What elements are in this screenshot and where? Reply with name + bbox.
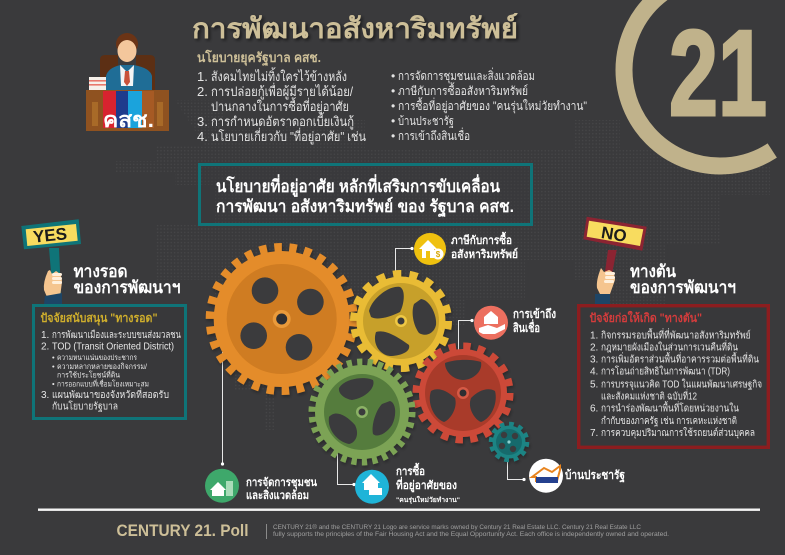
footer: divider bar [266, 524, 267, 539]
dotted world map backdrop [115, 100, 770, 430]
heading: dead end [630, 262, 736, 297]
panel: obstructing factors: และสังคมแห่งชาติ ฉบับที่12 [601, 388, 697, 402]
panel: supporting factors: 3. [41, 390, 49, 401]
panel: obstructing factors: กฎหมายผังเมืองในส่วนการเวนคืนที่ดิน [601, 340, 738, 354]
panel: obstructing factors: การควบคุมปริมาณการใช้รถยนต์ส่วนบุคคล [601, 427, 755, 439]
callout: community and environment: และสิ่งแวดล้อม [246, 486, 309, 502]
connector lines [222, 248, 523, 484]
text block: government policy: สังคมไทยไม่ทิ้งใครไว้ข้างหลัง [211, 67, 347, 84]
panel: obstructing factors [579, 306, 768, 447]
title: การพัฒนาอสังหาริมทรัพย์ [192, 13, 518, 44]
panel: obstructing factors: 6. [590, 404, 598, 415]
text block: policy bullets [391, 67, 587, 143]
text block: policy bullets: ภาษีกับการซื้ออสังหาริมทรัพย์ [398, 82, 528, 98]
panel: supporting factors: • [52, 353, 55, 362]
text block: government policy: 4. [197, 129, 208, 144]
text block: government policy: การปล่อยกู้เพื่อผู้มีรายได้น้อย/ [211, 83, 353, 100]
panel: obstructing factors: 7. [590, 428, 598, 439]
panel: obstructing factors: 5. [590, 379, 598, 390]
panel: obstructing factors: การนำร่องพัฒนาพื้นที่โดยหน่วยงานใน [601, 401, 739, 415]
footer: legal notice: CENTURY 21® and the CENTURY 21 Logo are service marks owned by Century 21 Real Estate LLC. Century 21 Real Estate LLC [273, 524, 642, 531]
icon: NO sign held in hand [583, 217, 647, 304]
text block: policy bullets: • [391, 84, 395, 98]
footer rule [38, 508, 760, 511]
panel: obstructing factors: กำกับของภาครัฐ เช่น การเคหะแห่งชาติ [601, 416, 737, 427]
panel: supporting factors: 1. [41, 330, 49, 341]
panel: obstructing factors: ปัจจัยก่อให้เกิด "ทางตัน" [590, 310, 702, 325]
text block: government policy: นโยบายเกี่ยวกับ "ที่อยู่อาศัย" เช่น [211, 128, 366, 145]
callout: community and environment [205, 469, 317, 503]
chart: orange gear [211, 248, 353, 390]
heading: way out: ของการพัฒนาฯ [74, 278, 180, 297]
text block: government policy: 2. [197, 84, 208, 99]
text block: policy bullets: • [391, 114, 395, 128]
panel: supporting factors: การพัฒนาเมืองและระบบขนส่งมวลชน [52, 329, 181, 341]
callout: property tax: ภาษีกับการซื้อ [451, 231, 512, 247]
callout: property tax: อสังหาริมทรัพย์ [451, 247, 518, 261]
text block: policy bullets: การจัดการชุมชนและสิ่งแวดล้อม [398, 67, 535, 84]
text block: policy bullets: การซื้อที่อยู่อาศัยของ "คนรุ่นใหม่วัยทำงาน" [398, 97, 587, 114]
text block: policy bullets: • [391, 69, 395, 83]
callout: housing policy headline: การพัฒนา อสังหาริมทรัพย์ ของ รัฐบาล คสช. [216, 196, 514, 218]
panel: supporting factors: TOD (Transit Oriented District) [52, 342, 174, 352]
panel: obstructing factors: 3. [590, 355, 598, 366]
panel: supporting factors: ปัจจัยสนับสนุน "ทางรอด" [40, 311, 158, 326]
panel: supporting factors: • [52, 380, 55, 388]
callout: Pracharat housing: บ้านประชารัฐ [565, 468, 625, 483]
chart: red gear [416, 346, 510, 440]
callout: credit access [474, 306, 556, 340]
text block: policy bullets: • [391, 99, 395, 113]
callout: housing purchase [355, 462, 460, 504]
callout: housing purchase: ที่อยู่อาศัยของ [396, 476, 457, 493]
panel: supporting factors: • [52, 362, 55, 371]
chart: teal gear [491, 424, 527, 460]
callout: community and environment: การจัดการชุมชน [246, 476, 317, 490]
panel: supporting factors: แผนพัฒนาของจังหวัดที่สอดรับ [52, 387, 169, 401]
text block: government policy: 1. [197, 69, 208, 84]
panel: supporting factors: ความหนาแน่นของประชากร [57, 353, 137, 362]
panel: obstructing factors: 4. [590, 367, 598, 378]
footer: legal notice: fully supports the principles of the Fair Housing Act and the Equal Opportunity Act. Each office is independently owned and operated. [273, 532, 669, 538]
callout: housing policy headline: นโยบายที่อยู่อาศัย หลักที่เสริมการขับเคลื่อน [216, 174, 500, 198]
callout: property tax: $ [436, 250, 441, 259]
callout: housing purchase: "คนรุ่นใหม่วัยทำงาน" [396, 495, 460, 504]
text block: policy bullets: • [391, 129, 395, 143]
footer: Century 21 Poll wordmark: CENTURY 21. Poll [116, 522, 248, 540]
panel: supporting factors: ความหลากหลายของกิจกรรม/ [57, 362, 148, 371]
callout: housing purchase: การซื้อ [396, 462, 425, 478]
icon: YES sign held in hand: YES [32, 224, 68, 247]
panel: supporting factors: 2. [41, 342, 49, 352]
text block: government policy: การกำหนดอัตราดอกเบี้ยเงินกู้ [211, 112, 354, 130]
panel: supporting factors: การออกแบบที่เชื่อมโยงเหมาะสม [57, 378, 149, 388]
heading: dead end: ทางตัน [630, 262, 676, 281]
callout: credit access: สินเชื่อ [513, 319, 540, 335]
panel: obstructing factors: 2. [590, 343, 598, 354]
text block: government policy: นโยบายยุครัฐบาล คสช. [197, 49, 321, 67]
panel: supporting factors: การใช้ประโยชน์ที่ดิน [57, 370, 120, 380]
footer: legal notice [273, 524, 669, 538]
callout: housing policy headline [200, 164, 532, 224]
callout: Pracharat housing [529, 459, 625, 493]
panel: obstructing factors: กิจกรรมรอบพื้นที่ที่พัฒนาอสังหาริมทรัพย์ [601, 327, 751, 341]
icon: minister at desk [86, 33, 169, 132]
icon: minister at desk: คสช. [103, 109, 154, 132]
text block: government policy: ปานกลางในการซื้อที่อยู่อาศัย [211, 97, 349, 115]
panel: supporting factors [34, 306, 186, 418]
callout: property tax [414, 231, 518, 265]
heading: way out [74, 262, 180, 297]
text block: government policy: 3. [197, 114, 208, 129]
text block: policy bullets: การเข้าถึงสินเชื่อ [398, 127, 470, 143]
chart: yellow gear [354, 274, 448, 368]
panel: obstructing factors: 1. [590, 330, 598, 341]
chart: green gear [312, 362, 412, 462]
connector end dots [221, 247, 526, 486]
icon: NO sign held in hand: NO [600, 223, 628, 246]
icon: YES sign held in hand [21, 219, 81, 304]
text block: policy bullets: บ้านประชารัฐ [398, 114, 454, 128]
logo: Century 21 seal [624, 0, 785, 166]
panel: obstructing factors: การโอนถ่ายสิทธิในการพัฒนา (TDR) [601, 365, 730, 378]
heading: way out: ทางรอด [74, 262, 128, 281]
heading: dead end: ของการพัฒนาฯ [630, 278, 736, 297]
text block: government policy [197, 49, 366, 145]
panel: obstructing factors: การเพิ่มอัตราส่วนพื้นที่อาคารรวมต่อพื้นที่ดิน [601, 352, 759, 366]
callout: credit access: การเข้าถึง [513, 307, 556, 321]
panel: supporting factors: กับนโยบายรัฐบาล [52, 400, 118, 412]
